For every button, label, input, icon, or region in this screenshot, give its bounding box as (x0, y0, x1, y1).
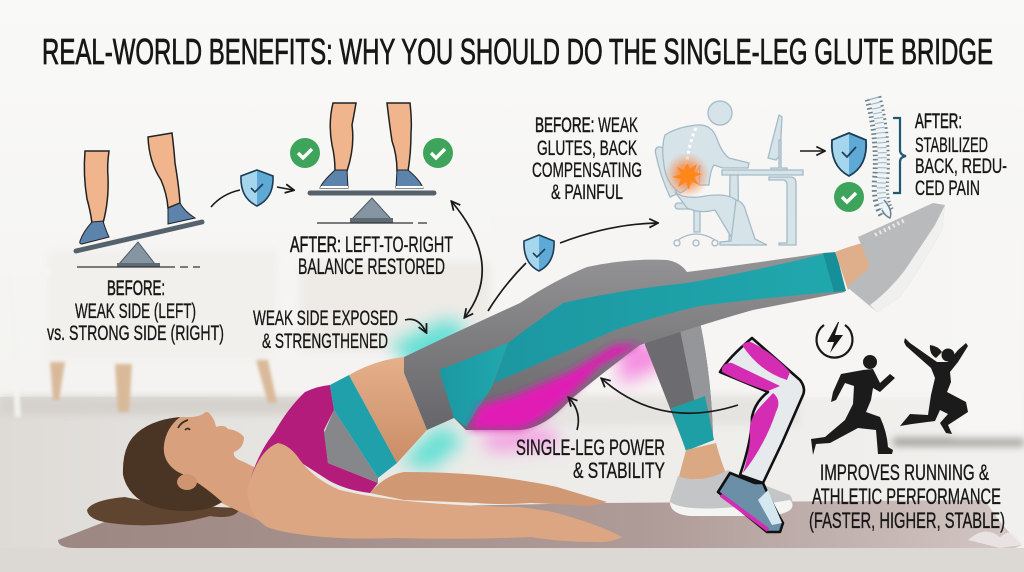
icon: spine (873, 98, 891, 218)
eye (178, 420, 190, 430)
icon: green check left (290, 138, 320, 168)
before text (47, 277, 224, 345)
far arm (370, 472, 607, 506)
icon: slouched person at desk (655, 101, 803, 246)
panel: back after (800, 98, 1007, 218)
glute highlight (468, 344, 642, 430)
top grey panel (324, 410, 378, 483)
arrow: weak side (405, 319, 426, 332)
label: single-leg power (516, 435, 665, 483)
panel: before balance (47, 133, 224, 345)
label: improves running (809, 460, 1005, 533)
teal waistband (330, 375, 397, 478)
arrow with shield between balance panels (211, 170, 293, 207)
panel: back pain before (532, 101, 803, 246)
before text: BEFORE: (107, 277, 165, 300)
before text: vs. STRONG SIDE (RIGHT) (47, 322, 224, 345)
before text: WEAK SIDE (LEFT) (75, 300, 196, 323)
teal panel at hip (439, 343, 508, 427)
icon: shield (832, 133, 866, 176)
after text: AFTER: LEFT-TO-RIGHT (290, 232, 453, 257)
glow: teal and magenta halos (390, 318, 665, 470)
before text: GLUTES, BACK (537, 137, 637, 160)
arrow: hip to shield (488, 263, 526, 311)
label: single-leg power: SINGLE-LEG POWER (516, 435, 665, 460)
supporting leg (645, 322, 792, 516)
abdomen (349, 357, 427, 463)
label: single-leg power: & STABILITY (573, 458, 665, 483)
raised shoe (847, 203, 945, 312)
label: weak side: WEAK SIDE EXPOSED (253, 307, 398, 330)
label: weak side: & STRENGTHENED (262, 330, 388, 353)
arrows around bridge (405, 202, 738, 430)
arrow: leg to glute (602, 379, 738, 413)
icon: green check right (423, 138, 453, 168)
ankle (835, 243, 870, 290)
arrow: balance double-headed (452, 202, 482, 317)
before text (532, 114, 642, 204)
arrow to shield (800, 150, 824, 152)
watermark (968, 532, 1022, 548)
icon: green check (834, 182, 864, 212)
after text: BALANCE RESTORED (298, 254, 445, 279)
arrow: to desk person (560, 223, 657, 243)
icon: anatomical leg (718, 338, 804, 532)
hips and raised leg grey (404, 253, 845, 430)
icon: pain burst (664, 152, 710, 198)
ear (177, 474, 197, 490)
after text: CED PAIN (915, 177, 980, 200)
raised leg teal stripe (494, 254, 845, 383)
mat (58, 500, 1022, 548)
before text: COMPENSATING (532, 159, 642, 182)
after text: AFTER: (915, 110, 962, 133)
icon: runner silhouette (811, 355, 895, 455)
icon: lightning in circle (817, 322, 853, 358)
before text: BEFORE: WEAK (535, 114, 638, 137)
icon: shield on bridge (524, 235, 554, 271)
near arm (247, 443, 622, 542)
woman in glute bridge (87, 203, 945, 542)
icon: jumper silhouette (900, 338, 968, 434)
sports bra (251, 385, 378, 493)
panel: after balance (290, 103, 453, 279)
neck and face (155, 412, 300, 522)
icon: tilted seesaw with legs (76, 133, 202, 267)
raised leg cuff (823, 252, 846, 292)
ponytail (87, 497, 240, 525)
before text: & PAINFUL (551, 181, 623, 204)
arrow: single-leg label (569, 398, 578, 430)
icon: level seesaw with legs (310, 103, 434, 223)
after text (915, 110, 1007, 200)
after text (290, 232, 453, 279)
label: weak side (253, 307, 398, 353)
hair (123, 417, 222, 511)
bracket (893, 118, 906, 193)
